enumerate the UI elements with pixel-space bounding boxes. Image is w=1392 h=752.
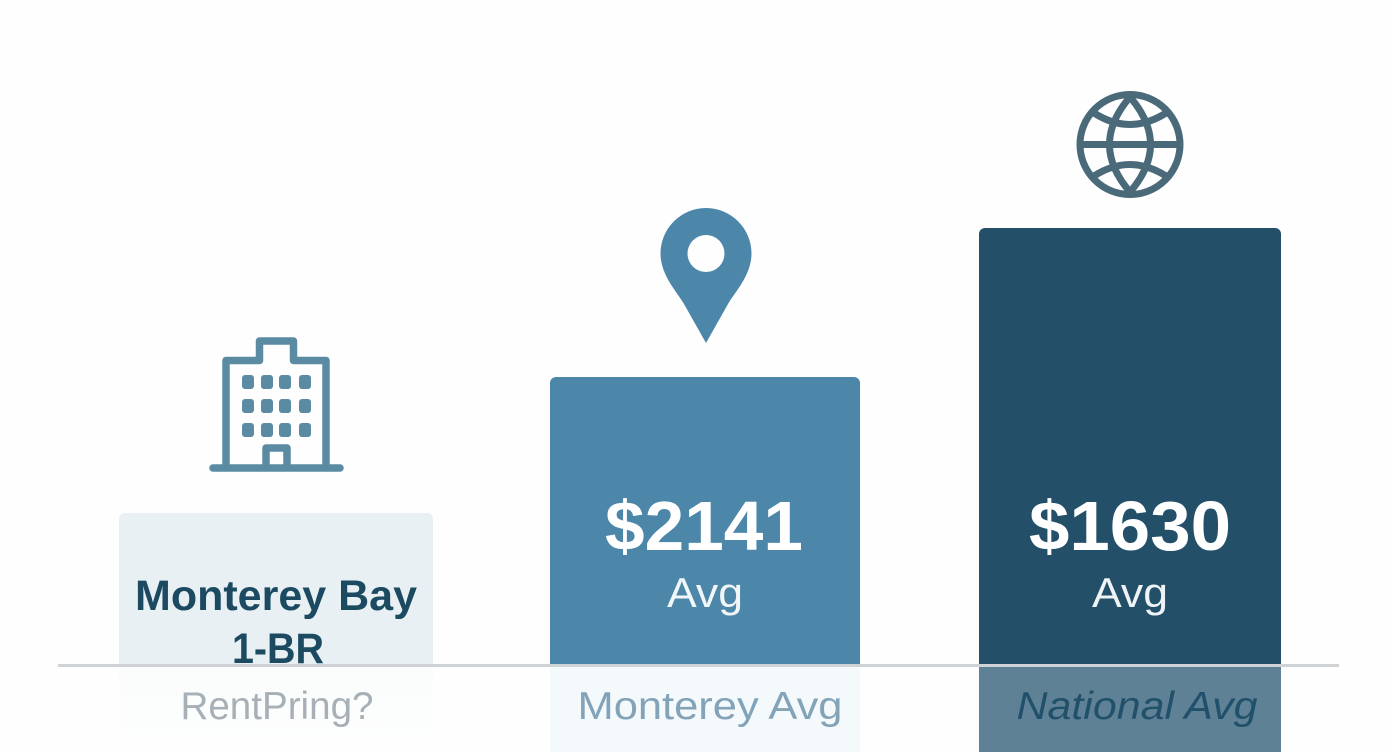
reflection: national average xyxy=(979,667,1281,752)
bar label: Monterey Bay 1-BR: 1-BR xyxy=(232,625,324,673)
icon: location pin xyxy=(660,208,752,343)
value: $1630 Avg: Avg xyxy=(1092,569,1168,616)
panel: national average bar xyxy=(979,228,1281,664)
value: $1630 Avg: $1630 xyxy=(1029,487,1231,565)
bar label: Monterey Bay 1-BR: Monterey Bay xyxy=(135,572,417,620)
panel: Monterey Bay 1-BR bar xyxy=(119,513,433,673)
value: $1630 Avg xyxy=(1029,487,1231,616)
reflection: Monterey average xyxy=(550,667,860,752)
icon: globe xyxy=(1080,94,1180,194)
panel: Monterey average bar xyxy=(550,377,860,664)
category label: Monterey Avg: Monterey Avg xyxy=(578,685,842,728)
category label: National Avg: National Avg xyxy=(1016,685,1258,728)
value: $2141 Avg: $2141 xyxy=(605,487,803,565)
reflection: Monterey Bay 1-BR xyxy=(119,667,433,752)
icon: apartment building xyxy=(213,341,340,468)
value: $2141 Avg xyxy=(605,487,803,616)
baseline xyxy=(58,664,1339,667)
bar label: Monterey Bay 1-BR xyxy=(135,572,417,673)
value: $2141 Avg: Avg xyxy=(667,569,743,616)
category label: RentPring?: RentPring? xyxy=(180,685,374,728)
